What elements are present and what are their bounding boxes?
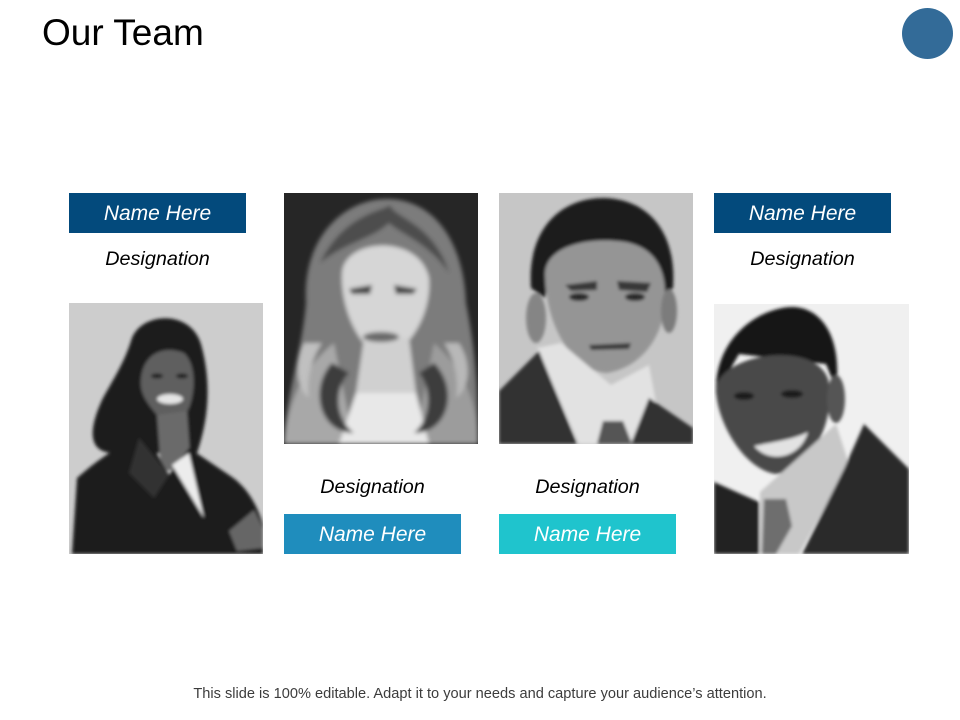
- portrait 2: woman with wavy hair: [284, 193, 478, 444]
- designation 3: Designation: [535, 476, 640, 498]
- footer note: This slide is 100% editable. Adapt it to your needs and capture your audience’s attention.: [193, 686, 767, 702]
- designation 1: Designation: [105, 248, 210, 270]
- designation 4: Designation: [750, 248, 855, 270]
- name bar 4: Name Here: [749, 202, 856, 225]
- portrait 3: man in suit: [499, 193, 693, 444]
- portrait 1: woman in blazer: [69, 303, 263, 554]
- title: Our Team: [42, 12, 204, 53]
- icon: circle badge: [902, 8, 953, 59]
- name bar 3: Name Here: [534, 523, 641, 546]
- name bar 3: [499, 514, 676, 554]
- portrait 4: smiling man: [714, 304, 909, 554]
- name bar 1: [69, 193, 246, 233]
- name bar 4: [714, 193, 891, 233]
- name bar 2: [284, 514, 461, 554]
- designation 2: Designation: [320, 476, 425, 498]
- name bar 1: Name Here: [104, 202, 211, 225]
- name bar 2: Name Here: [319, 523, 426, 546]
